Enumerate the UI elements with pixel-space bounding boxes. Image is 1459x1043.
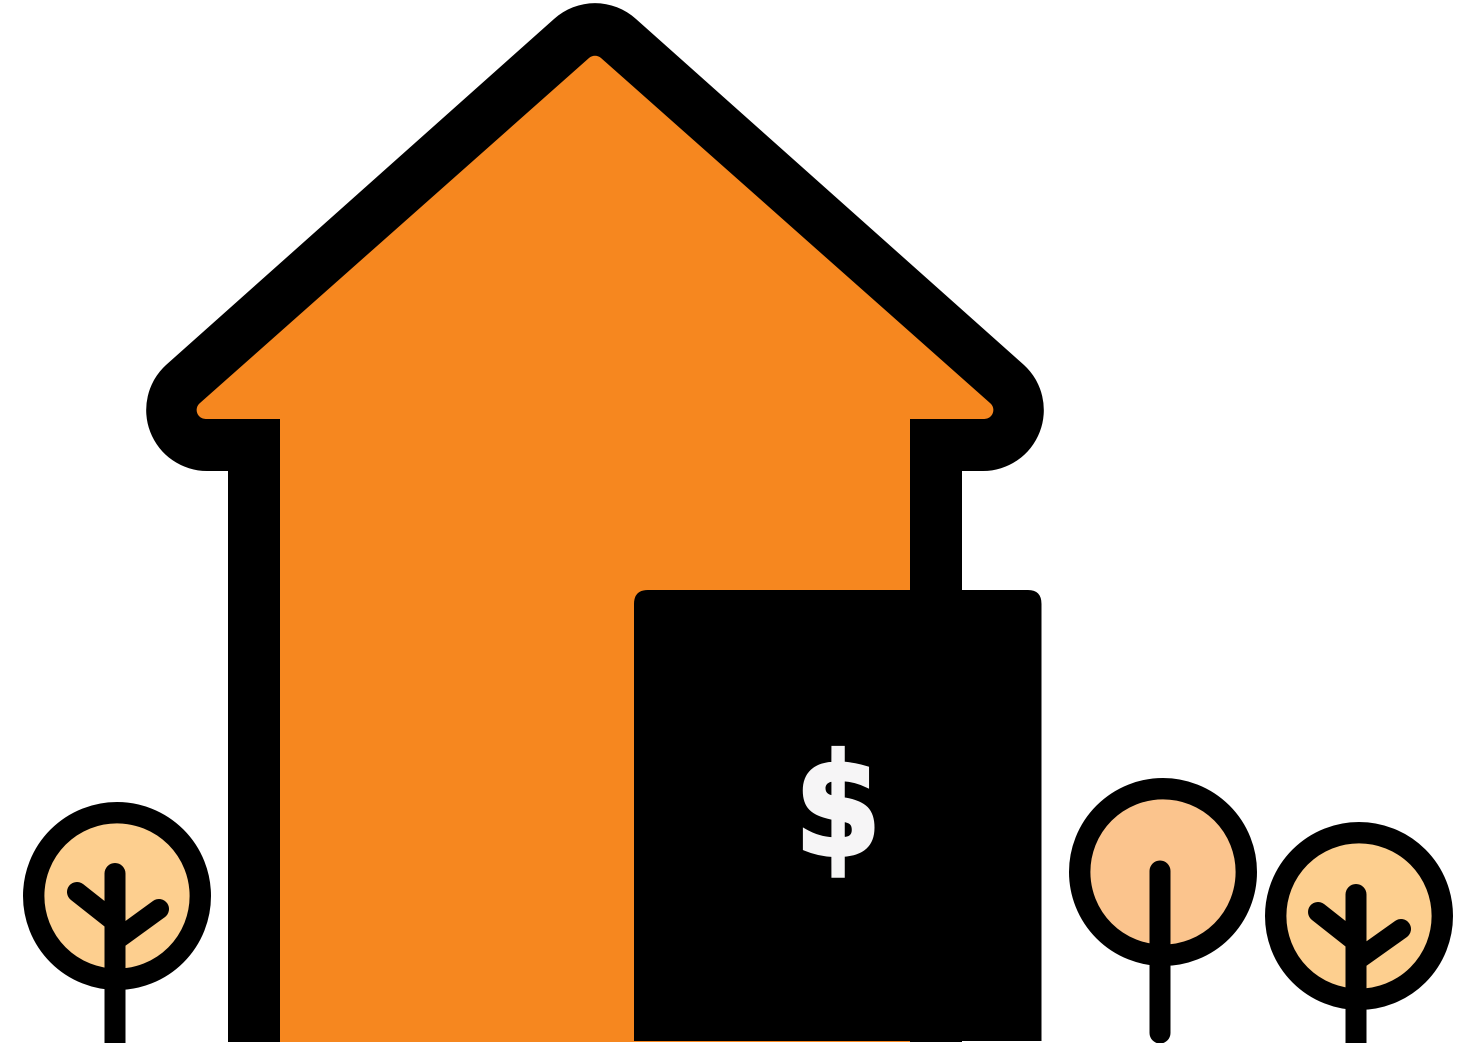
dollar sign: $ (795, 725, 881, 889)
tree middle (1080, 789, 1246, 1033)
tree left (34, 813, 200, 1043)
price tag door (634, 590, 1042, 1042)
house body with roof (146, 3, 1044, 1042)
tree right (1276, 833, 1442, 1043)
